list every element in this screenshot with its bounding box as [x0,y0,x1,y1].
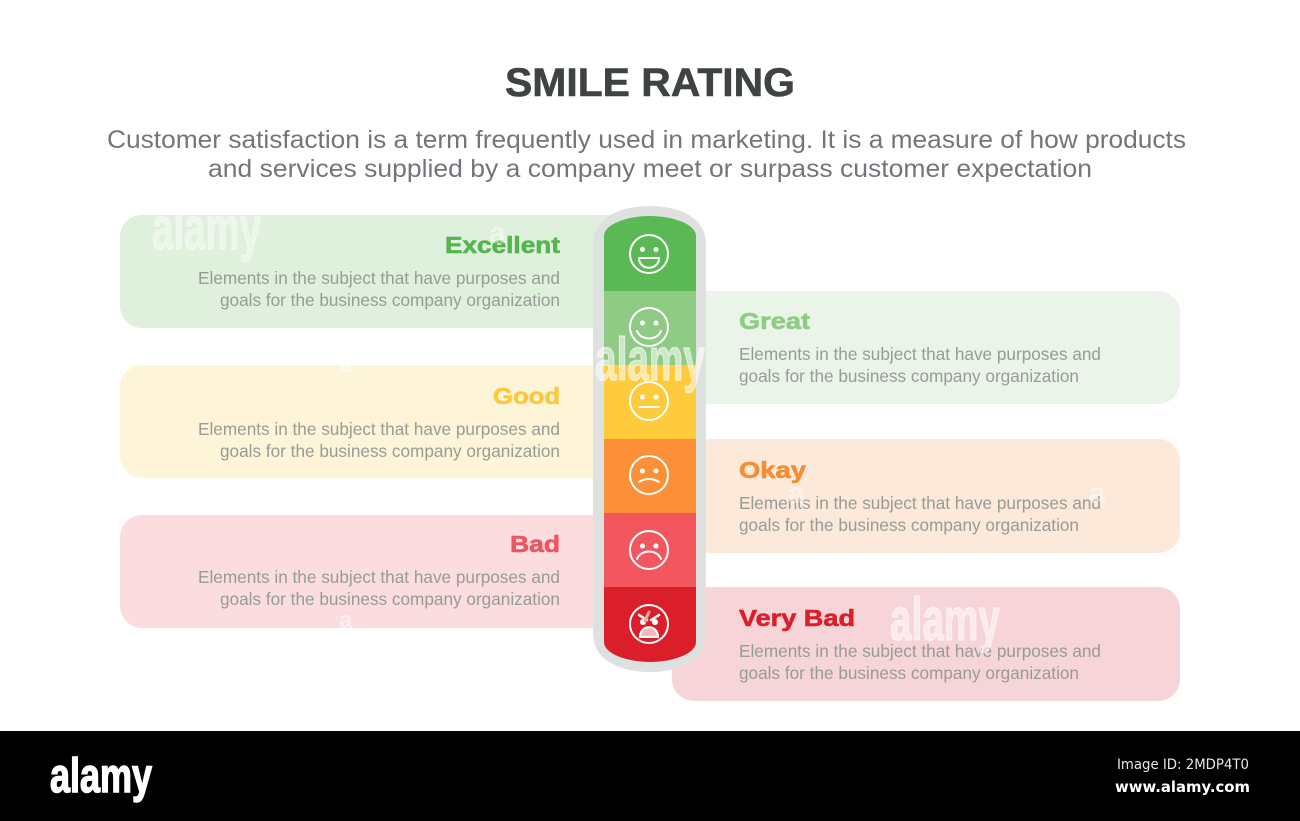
footer image id: Image ID: 2MDP4T0 [1117,757,1249,773]
icon: crying angry face [630,605,668,643]
panel: bad [120,515,630,628]
icon: neutral face [630,382,668,420]
panel: good [120,365,630,478]
panel: good: goals for the business company organization [220,441,560,461]
icon: laughing face [630,235,668,273]
watermark: alamy: a [788,477,805,510]
watermark: alamy [152,195,1106,653]
panel: excellent [120,215,630,328]
panel: very bad: goals for the business company organization [739,663,1079,683]
panel: bad: Bad [510,531,560,557]
footer image id [1115,757,1250,796]
panel: great: Great [739,308,810,334]
panel: okay: Elements in the subject that have purposes and [739,493,1101,513]
subtitle text block [107,126,1186,183]
capsule gauge [593,206,706,672]
panel: great: goals for the business company organization [739,366,1079,386]
footer bar [0,731,1300,821]
icon: sad face [630,531,668,569]
panel: okay: Okay [739,457,806,483]
panel: great [672,291,1180,404]
panel: great: Elements in the subject that have purposes and [739,344,1101,364]
title: SMILE RATING [505,61,795,105]
panel: very bad: Elements in the subject that have purposes and [739,641,1101,661]
subtitle text block: and services supplied by a company meet or surpass customer expectation [208,155,1092,183]
footer image id: www.alamy.com [1115,778,1250,796]
panel: okay: goals for the business company organization [739,515,1079,535]
panel: good: Good [493,383,560,409]
panel: excellent: Excellent [445,232,560,258]
watermark: alamy: alamy [152,195,261,262]
watermark: alamy: a [339,607,353,634]
panel: bad: Elements in the subject that have purposes and [198,567,560,587]
panel: good: Elements in the subject that have purposes and [198,419,560,439]
footer logo: alamy [50,750,152,803]
watermark: alamy: a [1089,477,1106,510]
panel: excellent: Elements in the subject that have purposes and [198,268,560,288]
icon: slightly sad face [630,456,668,494]
watermark: alamy: a [339,351,353,378]
watermark: alamy: alamy [890,586,1000,653]
subtitle text block: Customer satisfaction is a term frequently used in marketing. It is a measure of how products [107,126,1186,154]
icon: smiling face [630,308,668,346]
panel: very bad: Very Bad [739,605,855,631]
watermark: alamy: a [489,217,506,250]
panel: excellent: goals for the business company organization [220,290,560,310]
watermark: alamy: alamy [595,326,705,393]
panel: bad: goals for the business company organization [220,589,560,609]
panel: very bad [672,587,1180,701]
panel: okay [672,439,1180,553]
